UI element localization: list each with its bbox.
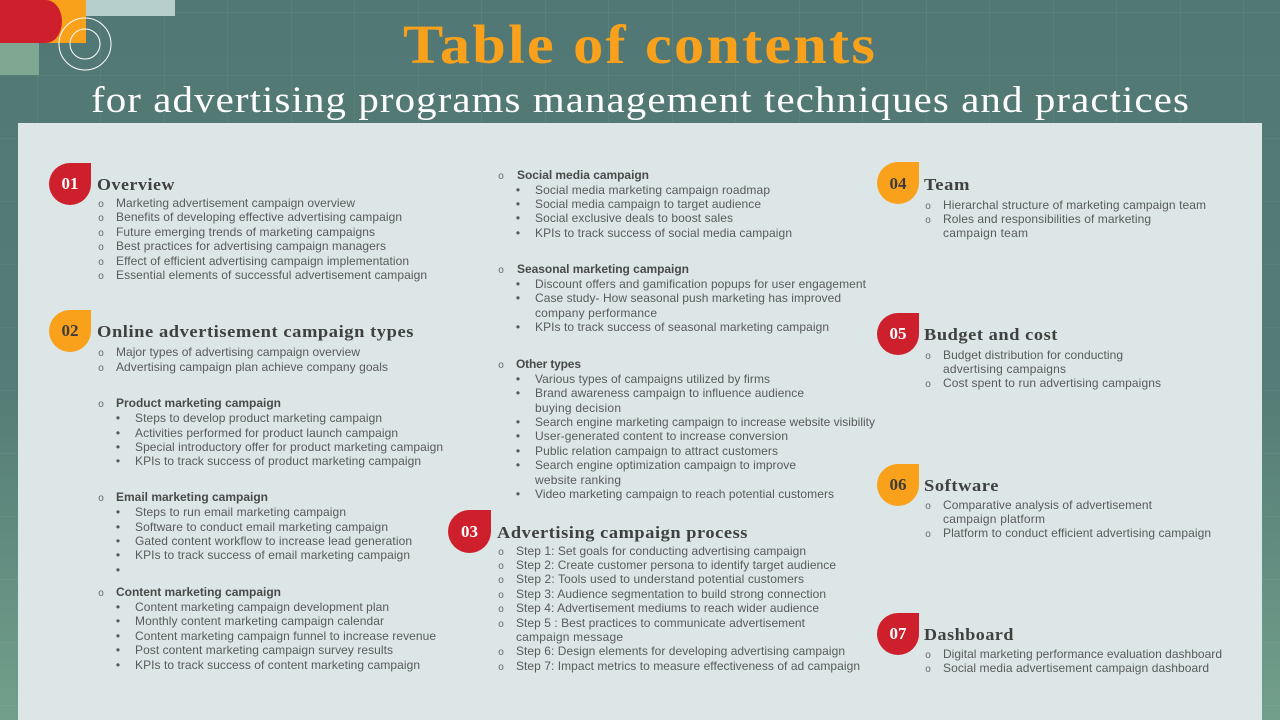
content marketing campaign list: •	[116, 629, 120, 643]
content marketing campaign list	[98, 585, 436, 672]
section 02: online advertisement campaign types: o	[98, 363, 104, 374]
section 01: overview: Essential elements of successful advertisement campaign	[116, 268, 427, 282]
other types list: Search engine optimization campaign to improve	[535, 458, 796, 472]
section 03: advertising campaign process: o	[498, 647, 504, 658]
section 01: overview: Best practices for advertising campaign managers	[116, 239, 386, 253]
other types list: Public relation campaign to attract customers	[535, 444, 778, 458]
product marketing campaign list: •	[116, 411, 120, 425]
section 07: dashboard: 07	[890, 624, 907, 643]
social media campaign list: Social exclusive deals to boost sales	[535, 211, 733, 225]
section 04: team: o	[925, 201, 931, 212]
section 06: software	[877, 464, 1211, 540]
other types list: Video marketing campaign to reach potential customers	[535, 487, 834, 501]
section 01: overview: Effect of efficient advertising campaign implementation	[116, 254, 409, 268]
section 03: advertising campaign process: Step 2: Tools used to understand potential customers	[516, 572, 804, 586]
social media campaign list: Social media campaign	[517, 168, 649, 182]
email marketing campaign list: o	[98, 493, 104, 504]
content marketing campaign list: KPIs to track success of content marketing campaign	[135, 658, 420, 672]
other types list: •	[516, 444, 520, 458]
other types list: •	[516, 386, 520, 400]
section 06: software: Software	[924, 476, 999, 495]
email marketing campaign list: Gated content workflow to increase lead generation	[135, 534, 412, 548]
other types list: website ranking	[534, 473, 621, 487]
subtitle: for advertising programs management techniques and practices	[91, 80, 1190, 121]
product marketing campaign list: •	[116, 440, 120, 454]
social media campaign list: Social media marketing campaign roadmap	[535, 183, 770, 197]
seasonal marketing campaign list: Discount offers and gamification popups for user engagement	[535, 277, 867, 291]
section 07: dashboard	[877, 613, 1222, 675]
section 03: advertising campaign process: Step 2: Create customer persona to identify target audience	[516, 558, 836, 572]
content marketing campaign list: Content marketing campaign funnel to increase revenue	[135, 629, 436, 643]
section 05: budget and cost: 05	[890, 324, 906, 343]
social media campaign list	[498, 168, 792, 240]
section 05: budget and cost: Budget and cost	[924, 325, 1058, 344]
email marketing campaign list: •	[116, 563, 120, 577]
section 01: overview: o	[98, 213, 104, 224]
social media campaign list: o	[498, 171, 504, 182]
section 02: online advertisement campaign types: Major types of advertising campaign overview	[116, 345, 360, 359]
seasonal marketing campaign list	[498, 262, 867, 334]
section 01: overview: Marketing advertisement campaign overview	[116, 196, 355, 210]
seasonal marketing campaign list: KPIs to track success of seasonal marketing campaign	[535, 320, 829, 334]
product marketing campaign list: Steps to develop product marketing campaign	[135, 411, 382, 425]
social media campaign list: •	[516, 226, 520, 240]
section 02: online advertisement campaign types: o	[98, 348, 104, 359]
product marketing campaign list	[98, 396, 443, 468]
content marketing campaign list: •	[116, 658, 120, 672]
social media campaign list: KPIs to track success of social media campaign	[535, 226, 792, 240]
other types list	[498, 357, 875, 501]
seasonal marketing campaign list: •	[516, 277, 520, 291]
section 01: overview: o	[98, 228, 104, 239]
section 05: budget and cost	[877, 313, 1161, 390]
section 06: software: o	[925, 501, 931, 512]
section 01: overview: o	[98, 199, 104, 210]
social media campaign list: •	[516, 211, 520, 225]
section 03: advertising campaign process: Advertising campaign process	[497, 523, 748, 542]
section 02: online advertisement campaign types: Advertising campaign plan achieve company goals	[116, 360, 388, 374]
section 01: overview: o	[98, 271, 104, 282]
content marketing campaign list: Content marketing campaign	[116, 585, 281, 599]
section 02: online advertisement campaign types: 02	[62, 321, 78, 340]
section 06: software: campaign platform	[943, 512, 1045, 526]
section 03: advertising campaign process: Step 7: Impact metrics to measure effectiveness of ad campaign	[516, 659, 860, 673]
section 06: software: 06	[890, 475, 906, 494]
other types list: o	[498, 360, 504, 371]
seasonal marketing campaign list: •	[516, 291, 520, 305]
content marketing campaign list: •	[116, 600, 120, 614]
section 01: overview: o	[98, 242, 104, 253]
section 05: budget and cost: advertising campaigns	[943, 362, 1066, 376]
seasonal marketing campaign list: Case study- How seasonal push marketing has improved	[535, 291, 841, 305]
product marketing campaign list: Product marketing campaign	[116, 396, 281, 410]
section 07: dashboard: Digital marketing performance evaluation dashboard	[943, 647, 1222, 661]
other types list: •	[516, 372, 520, 386]
content marketing campaign list: o	[98, 588, 104, 599]
other types list: Other types	[516, 357, 581, 371]
section 04: team: campaign team	[943, 226, 1028, 240]
section 05: budget and cost: o	[925, 379, 931, 390]
seasonal marketing campaign list: company performance	[535, 306, 657, 320]
other types list: buying decision	[535, 401, 621, 415]
other types list: Brand awareness campaign to influence audience	[535, 386, 804, 400]
other types list: •	[516, 458, 520, 472]
other types list: Search engine marketing campaign to increase website visibility	[535, 415, 875, 429]
section 03: advertising campaign process: o	[498, 561, 504, 572]
content marketing campaign list: Post content marketing campaign survey results	[135, 643, 393, 657]
section 04: team: 04	[890, 174, 907, 193]
content marketing campaign list: •	[116, 643, 120, 657]
section 06: software: Platform to conduct efficient advertising campaign	[943, 526, 1211, 540]
email marketing campaign list	[98, 490, 412, 577]
email marketing campaign list: •	[116, 534, 120, 548]
other types list: •	[516, 415, 520, 429]
section 03: advertising campaign process: Step 3: Audience segmentation to build strong connection	[516, 587, 826, 601]
section 01: overview: 01	[62, 174, 78, 193]
other types list: •	[516, 487, 520, 501]
email marketing campaign list: KPIs to track success of email marketing campaign	[135, 548, 410, 562]
section 01: overview: o	[98, 257, 104, 268]
email marketing campaign list: Steps to run email marketing campaign	[135, 505, 346, 519]
other types list: •	[516, 429, 520, 443]
social media campaign list: Social media campaign to target audience	[535, 197, 761, 211]
section 04: team: Team	[924, 175, 970, 194]
section 03: advertising campaign process: o	[498, 590, 504, 601]
section 07: dashboard: Social media advertisement campaign dashboard	[943, 661, 1209, 675]
product marketing campaign list: o	[98, 399, 104, 410]
section 04: team: o	[925, 215, 931, 226]
email marketing campaign list: Email marketing campaign	[116, 490, 268, 504]
section 03: advertising campaign process: campaign message	[516, 630, 623, 644]
section 03: advertising campaign process: o	[498, 619, 504, 630]
other types list: User-generated content to increase conversion	[535, 429, 788, 443]
product marketing campaign list: Special introductory offer for product marketing campaign	[135, 440, 443, 454]
section 05: budget and cost: o	[925, 351, 931, 362]
email marketing campaign list: •	[116, 520, 120, 534]
other types list: Various types of campaigns utilized by firms	[535, 372, 770, 386]
section 03: advertising campaign process: 03	[461, 522, 478, 541]
section 03: advertising campaign process: Step 6: Design elements for developing advertising campaign	[516, 644, 845, 658]
product marketing campaign list: •	[116, 454, 120, 468]
decorative corner shapes	[0, 0, 175, 75]
product marketing campaign list: KPIs to track success of product marketing campaign	[135, 454, 421, 468]
section 02: online advertisement campaign types: Online advertisement campaign types	[97, 322, 414, 341]
section 05: budget and cost: Budget distribution for conducting	[943, 348, 1123, 362]
section 04: team: Roles and responsibilities of marketing	[943, 212, 1151, 226]
section 03: advertising campaign process: Step 4: Advertisement mediums to reach wider audience	[516, 601, 819, 615]
section 02: online advertisement campaign types	[49, 310, 443, 672]
section 06: software: o	[925, 529, 931, 540]
seasonal marketing campaign list: Seasonal marketing campaign	[517, 262, 689, 276]
section 03: advertising campaign process: Step 5 : Best practices to communicate advertisement	[516, 616, 806, 630]
section 03: advertising campaign process	[448, 510, 860, 673]
content marketing campaign list: Content marketing campaign development plan	[135, 600, 389, 614]
section 03: advertising campaign process: Step 1: Set goals for conducting advertising campaign	[516, 544, 806, 558]
section 04: team	[877, 162, 1206, 240]
section 01: overview: Benefits of developing effective advertising campaign	[116, 210, 402, 224]
email marketing campaign list: Software to conduct email marketing campaign	[135, 520, 388, 534]
section 04: team: Hierarchal structure of marketing campaign team	[943, 198, 1206, 212]
section 03: advertising campaign process: o	[498, 604, 504, 615]
title: Table of contents	[403, 14, 877, 75]
section 03: advertising campaign process: o	[498, 575, 504, 586]
content marketing campaign list: Monthly content marketing campaign calendar	[135, 614, 384, 628]
content marketing campaign list: •	[116, 614, 120, 628]
product marketing campaign list: •	[116, 426, 120, 440]
section 07: dashboard: Dashboard	[924, 625, 1014, 644]
section 07: dashboard: o	[925, 650, 931, 661]
section 06: software: Comparative analysis of advertisement	[943, 498, 1153, 512]
section 01: overview: Future emerging trends of marketing campaigns	[116, 225, 375, 239]
section 01: overview: Overview	[97, 175, 175, 194]
social media campaign list: •	[516, 183, 520, 197]
product marketing campaign list: Activities performed for product launch campaign	[135, 426, 398, 440]
email marketing campaign list: •	[116, 548, 120, 562]
section 03: advertising campaign process: o	[498, 547, 504, 558]
section 01: overview	[49, 163, 427, 282]
seasonal marketing campaign list: •	[516, 320, 520, 334]
email marketing campaign list: •	[116, 505, 120, 519]
section 07: dashboard: o	[925, 664, 931, 675]
seasonal marketing campaign list: o	[498, 265, 504, 276]
section 05: budget and cost: Cost spent to run advertising campaigns	[943, 376, 1161, 390]
section 03: advertising campaign process: o	[498, 662, 504, 673]
social media campaign list: •	[516, 197, 520, 211]
